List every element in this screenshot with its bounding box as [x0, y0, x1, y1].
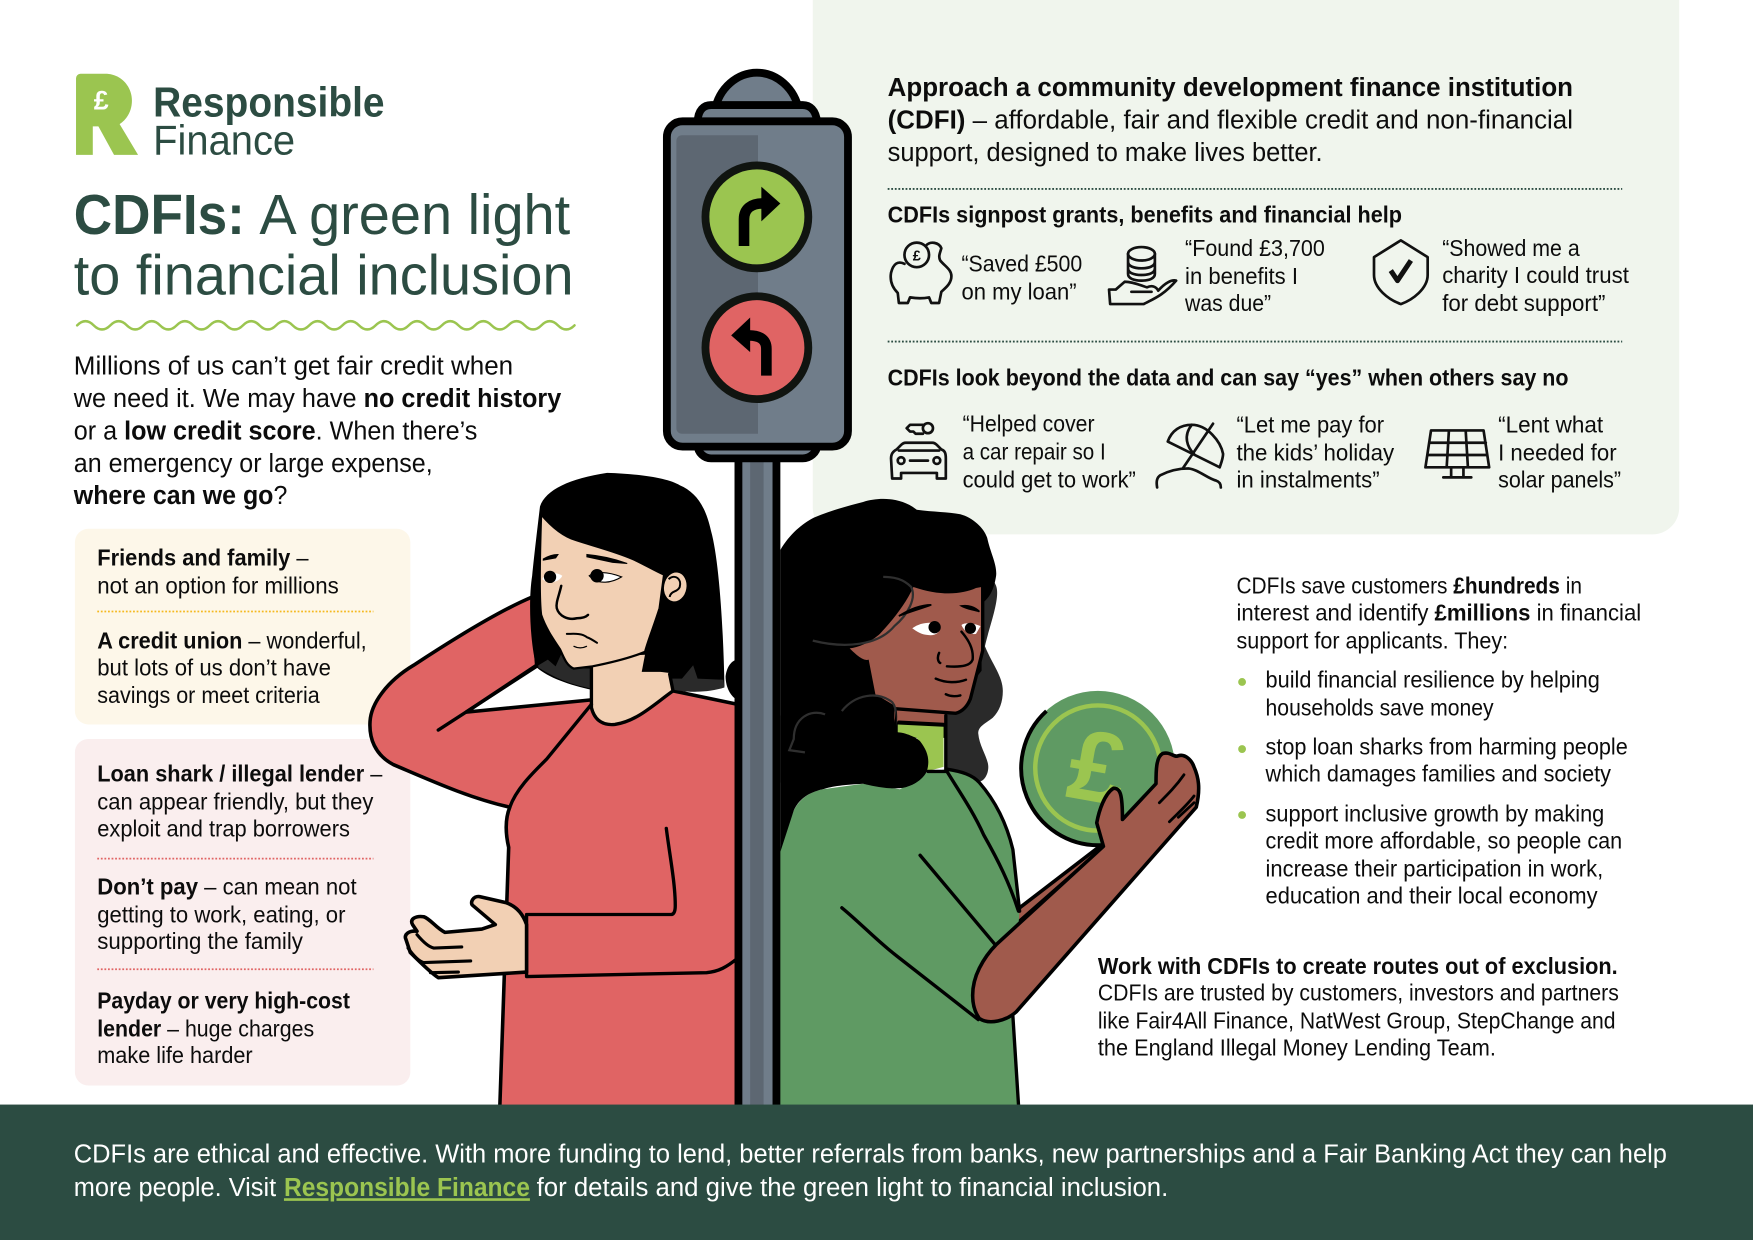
face — [850, 587, 982, 713]
quote: saved 500: on my loan” — [961, 279, 1077, 305]
panel: risky options: getting to work, eating, or — [97, 901, 346, 927]
housing — [667, 121, 848, 447]
call to action text: like Fair4All Finance, NatWest Group, StepChange and — [1098, 1008, 1615, 1034]
logo mark — [76, 74, 138, 155]
call to action text — [1098, 953, 1619, 1060]
bullet list: stop loan sharks from harming people — [1266, 734, 1628, 760]
shirt lines — [842, 769, 1020, 1105]
intro: approach a CDFI: (CDFI) – affordable, fair and flexible credit and non-financial — [888, 107, 1573, 135]
shirt — [370, 597, 738, 1109]
quote: showed me a charity: for debt support” — [1442, 290, 1605, 316]
icon: solar panel — [1425, 430, 1489, 477]
icon: car and key — [891, 423, 946, 478]
intro paragraph: we need it. We may have no credit history — [73, 385, 562, 413]
intro paragraph: an emergency or large expense, — [74, 450, 433, 478]
traffic light — [667, 73, 848, 1107]
quote: solar panels — [1498, 412, 1621, 492]
icon: piggy bank: £ — [913, 248, 921, 264]
intro paragraph: or a low credit score. When there’s — [74, 417, 477, 445]
heading: beyond the data: CDFIs look beyond the data and can say “yes” when others say no — [888, 365, 1569, 391]
logo wordmark: Responsible — [153, 79, 385, 125]
logo wordmark — [153, 79, 385, 163]
panel: risky options: Loan shark / illegal lender – — [97, 760, 383, 786]
quote: solar panels: I needed for — [1498, 440, 1617, 466]
quote: showed me a charity — [1442, 235, 1630, 316]
arm and body lines — [438, 666, 738, 977]
bullet list: credit more affordable, so people can — [1266, 828, 1622, 854]
panel: risky options: make life harder — [97, 1042, 253, 1068]
quote: car repair: “Helped cover — [963, 411, 1095, 437]
intro paragraph — [73, 353, 562, 510]
call to action text: the England Illegal Money Lending Team. — [1098, 1034, 1496, 1060]
bullet list: support inclusive growth by making — [1266, 801, 1604, 827]
panel: friends and credit unions: savings or meet criteria — [97, 682, 320, 708]
intro: approach a CDFI — [888, 74, 1573, 167]
quote: showed me a charity: “Showed me a — [1442, 235, 1580, 261]
call to action text: CDFIs are trusted by customers, investors and partners — [1098, 980, 1619, 1006]
facial features — [542, 555, 627, 648]
arm and hand — [973, 753, 1199, 1022]
coin: £ — [1060, 708, 1135, 828]
logo — [76, 74, 385, 163]
facial features — [899, 605, 980, 696]
bullet list: increase their participation in work, — [1266, 855, 1603, 881]
call to action text: Work with CDFIs to create routes out of exclusion. — [1098, 953, 1618, 979]
benefits text: CDFIs save customers £hundreds in — [1236, 573, 1582, 599]
quote: solar panels: “Lent what — [1498, 412, 1604, 438]
intro paragraph: where can we go? — [73, 482, 287, 510]
panel: risky options: Don’t pay – can mean not — [97, 873, 357, 899]
pole — [735, 458, 780, 1107]
benefits text: interest and identify £millions in financial — [1236, 599, 1641, 625]
panel: friends and credit unions: A credit union – wonderful, — [97, 627, 367, 653]
quote: found 3700: in benefits I — [1185, 263, 1298, 289]
panel: friends and credit unions: but lots of us don’t have — [97, 654, 331, 680]
footer banner — [0, 1105, 1753, 1240]
panel: risky options: supporting the family — [97, 928, 304, 954]
lower collar — [698, 445, 817, 458]
ear — [660, 569, 690, 604]
footer banner: more people. Visit — [74, 1172, 277, 1202]
quote: kids' holiday: “Let me pay for — [1236, 412, 1384, 438]
neck and collar — [894, 699, 946, 771]
quote: found 3700 — [1184, 235, 1325, 316]
icon: hand holding coins — [1109, 247, 1176, 304]
panel: friends and credit unions: not an option for millions — [97, 573, 339, 599]
title: to financial inclusion — [74, 244, 574, 308]
panel: risky options: can appear friendly, but they — [97, 788, 374, 814]
footer banner: Responsible Finance — [284, 1172, 530, 1202]
icon: piggy bank — [891, 243, 951, 303]
benefits text — [1236, 573, 1641, 908]
back hair — [530, 473, 724, 692]
bullet list — [1238, 667, 1628, 908]
benefits text: support for applicants. They: — [1236, 627, 1508, 653]
panel: risky options: Payday or very high-cost — [97, 987, 350, 1013]
green signal — [705, 165, 808, 268]
icon: beach umbrella — [1157, 424, 1223, 487]
hand — [405, 897, 527, 978]
quote: saved 500: “Saved £500 — [961, 251, 1082, 277]
panel: what a CDFI offers — [813, 0, 1679, 534]
shirt — [777, 769, 1020, 1109]
quote: kids' holiday: in instalments” — [1236, 466, 1380, 492]
forearm strip — [1012, 845, 1103, 928]
bullet list: which damages families and society — [1265, 760, 1612, 786]
panel: risky options: exploit and trap borrowers — [97, 815, 350, 841]
bullet list: education and their local economy — [1266, 882, 1598, 908]
quote: car repair — [963, 411, 1136, 492]
upper collar — [698, 105, 817, 123]
footer banner: for details and give the green light to financial inclusion. — [537, 1172, 1168, 1202]
intro: approach a CDFI: Approach a community development finance institution — [888, 74, 1573, 102]
logo wordmark: Finance — [153, 117, 295, 163]
jaw and hair lines — [789, 577, 983, 788]
quote: showed me a charity: charity I could trust — [1442, 262, 1630, 288]
red signal — [705, 296, 808, 399]
title: A green light — [259, 183, 570, 247]
bullet list: build financial resilience by helping — [1266, 667, 1600, 693]
quote: kids' holiday: the kids’ holiday — [1236, 440, 1395, 466]
panel: friends and credit unions — [75, 529, 410, 724]
quote: found 3700: “Found £3,700 — [1185, 235, 1325, 261]
quote: saved 500 — [961, 251, 1082, 305]
title — [74, 183, 574, 308]
panel: friends and credit unions: Friends and family – — [97, 545, 309, 571]
quote: car repair: could get to work” — [963, 466, 1136, 492]
icon: shield — [1374, 240, 1428, 304]
panel: risky options: lender – huge charges — [97, 1015, 314, 1041]
coin — [1021, 691, 1175, 845]
back hair — [726, 559, 1003, 781]
quote: car repair: a car repair so I — [963, 438, 1106, 464]
bullet list: households save money — [1266, 695, 1494, 721]
woman with no options — [370, 473, 738, 1109]
quote: found 3700: was due” — [1184, 290, 1271, 316]
footer banner: CDFIs are ethical and effective. With more funding to lend, better referrals from banks, new partnerships and a Fair Banking Act they can help — [74, 1139, 1667, 1169]
quote: solar panels: solar panels” — [1498, 466, 1621, 492]
quote: kids' holiday — [1236, 412, 1395, 492]
heading: signpost: CDFIs signpost grants, benefits and financial help — [888, 201, 1402, 227]
dome — [714, 73, 799, 112]
panel: risky options — [75, 739, 410, 1086]
title: CDFIs: — [74, 183, 245, 247]
woman with green coin — [726, 499, 1199, 1109]
logo mark: £ — [94, 86, 109, 116]
neck — [591, 648, 673, 725]
face — [540, 514, 664, 669]
intro: approach a CDFI: support, designed to make lives better. — [888, 139, 1323, 167]
intro paragraph: Millions of us can’t get fair credit when — [74, 353, 513, 381]
main hair — [780, 499, 996, 852]
